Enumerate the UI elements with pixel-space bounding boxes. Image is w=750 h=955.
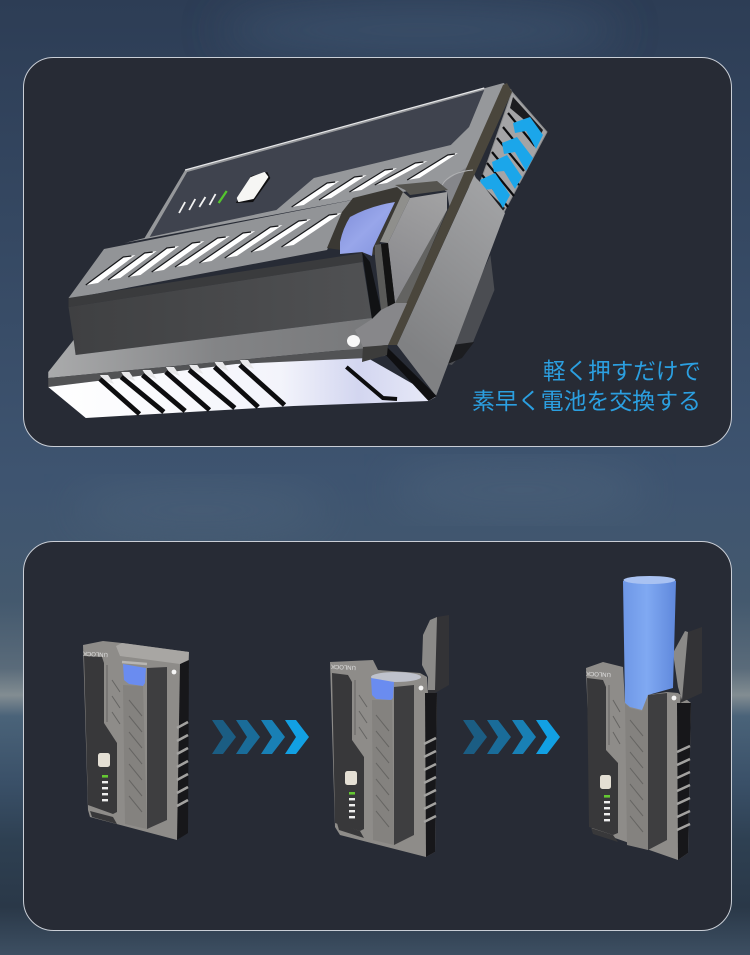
- brown side strip: [388, 83, 512, 345]
- battery LEDs: [349, 792, 355, 818]
- right dark column: [648, 693, 667, 850]
- label: UNLOCK: [331, 663, 356, 670]
- caption: [472, 358, 701, 414]
- device top surface: [69, 83, 512, 365]
- main device illustration: [48, 83, 547, 418]
- wedge beside lid: [372, 208, 448, 345]
- window: [123, 664, 146, 686]
- LED dot: [419, 686, 423, 690]
- LED dot: [672, 696, 676, 700]
- lid top lip: [395, 181, 448, 195]
- hinge arc: [442, 170, 473, 185]
- battery in window: [340, 202, 395, 256]
- side fins: [177, 722, 188, 806]
- panel: top product panel: [24, 58, 732, 446]
- vent fins: [482, 113, 535, 207]
- bar black end: [362, 252, 381, 319]
- battery LEDs: [102, 775, 108, 801]
- black strip: [425, 693, 437, 857]
- vent end face: [480, 92, 547, 212]
- panel: bottom steps panel: [24, 542, 732, 930]
- top lid: [116, 643, 189, 664]
- lid face: [388, 192, 447, 303]
- button: [98, 753, 110, 767]
- label: UNLOCK: [586, 670, 611, 677]
- center gray column: [625, 695, 648, 850]
- battery LEDs: [604, 795, 610, 821]
- button: [600, 775, 611, 789]
- center gray column: [372, 700, 394, 845]
- device 3: battery ejected: [586, 576, 702, 860]
- battery top: [624, 576, 676, 584]
- side fins: [677, 746, 690, 830]
- silver band by dot: [355, 303, 407, 347]
- bar front and lower body: [48, 253, 437, 418]
- lid fold gray: [375, 244, 388, 310]
- large silver side face: [397, 176, 505, 396]
- open lid: [422, 615, 449, 693]
- bottom notch: [90, 811, 117, 824]
- left dark panel: [84, 656, 117, 814]
- tread marks: [355, 680, 389, 827]
- caption: 軽く押すだけで: [543, 358, 701, 384]
- bottom notch: [591, 828, 618, 842]
- lid fold black: [381, 243, 395, 308]
- blue chevrons on vent: [480, 117, 543, 208]
- open lid: [680, 627, 702, 703]
- right dark column: [394, 685, 414, 845]
- device 1: closed: [83, 641, 189, 840]
- vent dark blocks: [481, 97, 543, 212]
- battery window ring: [327, 187, 403, 255]
- left dark panel: [587, 678, 618, 835]
- label: UNLOCK: [83, 650, 108, 657]
- tread marks: [107, 665, 142, 812]
- tread marks: [609, 685, 643, 832]
- right dark column: [147, 667, 167, 829]
- battery top disc: [371, 672, 421, 682]
- right black strip: [177, 660, 189, 840]
- seam and connector: [362, 345, 388, 362]
- device 2: lid opened: [330, 615, 449, 857]
- battery cell: [623, 578, 676, 710]
- bottom notch: [337, 823, 364, 838]
- arrows: step 2 to 3: [463, 720, 560, 754]
- left dark panel: [332, 673, 364, 831]
- side fins: [424, 738, 436, 822]
- battery window: [371, 678, 394, 700]
- LED dot: [172, 670, 176, 674]
- black strip: [677, 703, 691, 860]
- arrows: step 1 to 2: [212, 720, 309, 754]
- white indicator dot: [347, 335, 360, 347]
- hinge fill: [438, 165, 476, 210]
- center gray column: [123, 685, 147, 829]
- button: [345, 771, 357, 785]
- lid bevel: [380, 192, 410, 243]
- caption: 素早く電池を交換する: [472, 388, 701, 414]
